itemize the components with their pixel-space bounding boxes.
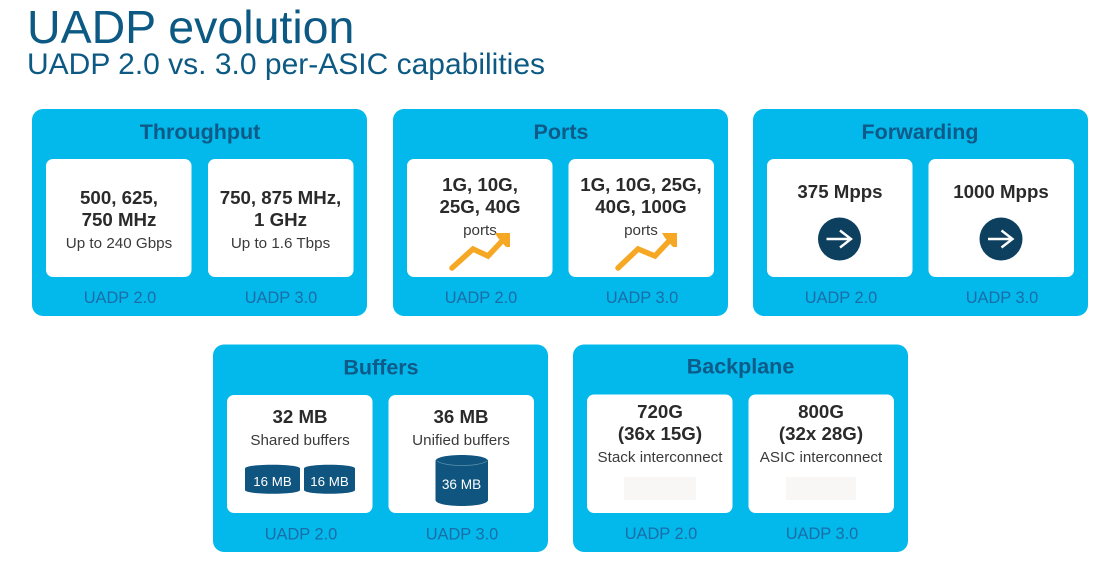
card: backplane UADP 3.0	[748, 394, 894, 513]
icon: 16 MB disc: 16 MB	[310, 474, 349, 489]
card: throughput UADP 2.0: Up to 240 Gbps	[66, 235, 173, 252]
label: throughput UADP 2.0: UADP 2.0	[84, 289, 156, 307]
card: ports UADP 3.0: 40G, 100G	[595, 196, 687, 217]
card: buffers UADP 2.0: 32 MB	[272, 406, 328, 427]
card: backplane UADP 2.0	[587, 394, 732, 513]
card: forwarding UADP 3.0	[928, 159, 1074, 277]
icon: 16 MB disc	[304, 465, 355, 494]
subtitle: UADP 2.0 vs. 3.0 per-ASIC capabilities	[27, 48, 545, 81]
label: throughput UADP 3.0: UADP 3.0	[245, 289, 317, 307]
label: backplane UADP 3.0: UADP 3.0	[786, 525, 858, 543]
heading: ports: Ports	[534, 120, 589, 144]
card: throughput UADP 3.0: 1 GHz	[254, 209, 307, 230]
card: backplane UADP 2.0: (36x 15G)	[618, 423, 702, 444]
label: forwarding UADP 3.0: UADP 3.0	[966, 289, 1038, 307]
card: throughput UADP 2.0: 500, 625,	[80, 187, 158, 208]
heading: forwarding: Forwarding	[861, 120, 979, 144]
card: ports UADP 2.0: 25G, 40G	[439, 196, 521, 217]
heading: backplane: Backplane	[687, 354, 794, 378]
heading: buffers: Buffers	[343, 356, 419, 380]
panel: backplane	[573, 344, 908, 552]
label: backplane UADP 2.0: UADP 2.0	[625, 525, 697, 543]
card: throughput UADP 2.0	[46, 159, 192, 277]
card: buffers UADP 2.0	[227, 395, 372, 513]
card: forwarding UADP 2.0	[767, 159, 912, 277]
card: ports UADP 3.0: 1G, 10G, 25G,	[580, 174, 702, 195]
card: buffers UADP 3.0	[388, 395, 534, 513]
panel: forwarding	[753, 109, 1088, 316]
icon: 16 MB disc: 16 MB	[253, 474, 292, 489]
card: backplane UADP 2.0: 720G	[637, 401, 683, 422]
icon: 16 MB disc	[245, 465, 300, 494]
card: forwarding UADP 2.0: 375 Mpps	[797, 181, 883, 202]
smudge: blurred-out area	[786, 477, 856, 500]
card: buffers UADP 3.0: Unified buffers	[412, 432, 510, 449]
label: ports UADP 2.0: UADP 2.0	[445, 289, 517, 307]
icon: 36 MB disc	[436, 455, 488, 506]
card: ports UADP 2.0: 1G, 10G,	[442, 174, 518, 195]
icon: rising arrow	[452, 233, 510, 268]
card: ports UADP 3.0	[568, 159, 714, 277]
smudge: blurred-out area	[624, 477, 696, 500]
card: backplane UADP 3.0: (32x 28G)	[779, 423, 863, 444]
heading: throughput: Throughput	[140, 120, 260, 144]
label: ports UADP 3.0: UADP 3.0	[606, 289, 678, 307]
card: throughput UADP 3.0: 750, 875 MHz,	[220, 187, 341, 208]
icon: rising arrow	[618, 233, 677, 268]
card: forwarding UADP 3.0: 1000 Mpps	[953, 181, 1049, 202]
card: ports UADP 2.0	[407, 159, 552, 277]
label: forwarding UADP 2.0: UADP 2.0	[805, 289, 877, 307]
card: buffers UADP 3.0: 36 MB	[433, 406, 489, 427]
panel: buffers	[213, 344, 548, 552]
card: buffers UADP 2.0: Shared buffers	[250, 432, 350, 449]
title: UADP evolution	[27, 1, 354, 53]
card: backplane UADP 2.0: Stack interconnect	[598, 449, 723, 466]
icon: 36 MB disc: 36 MB	[442, 477, 481, 492]
icon: forward arrow	[818, 218, 861, 260]
card: ports UADP 3.0: ports	[624, 222, 658, 239]
panel: throughput	[32, 109, 367, 316]
label: buffers UADP 3.0: UADP 3.0	[426, 526, 498, 544]
card: throughput UADP 3.0	[208, 159, 354, 277]
panel: ports	[393, 109, 728, 316]
card: backplane UADP 3.0: 800G	[798, 401, 844, 422]
card: ports UADP 2.0: ports	[463, 222, 497, 239]
card: throughput UADP 2.0: 750 MHz	[82, 209, 156, 230]
card: throughput UADP 3.0: Up to 1.6 Tbps	[231, 235, 331, 252]
label: buffers UADP 2.0: UADP 2.0	[265, 526, 337, 544]
icon: forward arrow	[980, 218, 1022, 260]
card: backplane UADP 3.0: ASIC interconnect	[760, 449, 883, 466]
